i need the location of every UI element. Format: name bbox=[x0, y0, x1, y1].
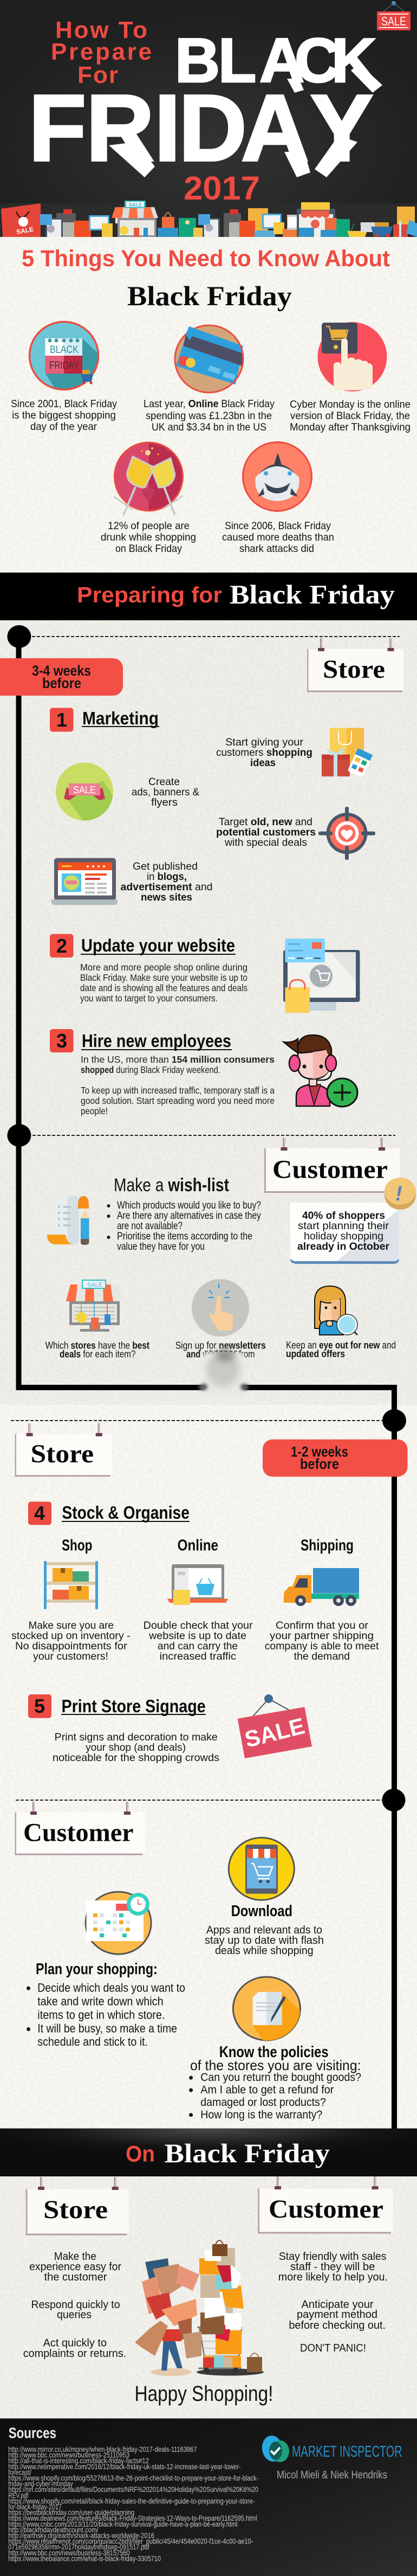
text: store tips: Make the bbox=[54, 2250, 96, 2263]
column: shop: Shop bbox=[62, 1537, 92, 1554]
panel: 1-2 weeks background bbox=[0, 1405, 417, 2129]
text: sign up for newsletters bbox=[175, 1340, 266, 1360]
list: source links: REV.pdf bbox=[8, 2491, 29, 2500]
title: How To Prepare For bbox=[51, 17, 152, 88]
step 3: hire new employees bbox=[50, 1029, 357, 1116]
icon: woman with magnifier bbox=[315, 1286, 357, 1335]
timeline: node 2 bbox=[7, 1124, 395, 1147]
list: source links: forecast/ bbox=[8, 2468, 31, 2476]
text: shop: stocked up on inventory - bbox=[11, 1630, 131, 1642]
text: since 2001: Since 2001, Black Friday bbox=[11, 398, 117, 410]
list: policy bullets: How long is the warranty? bbox=[200, 2109, 322, 2121]
text: authors: Micol Mieli & Niek Hendriks bbox=[277, 2469, 387, 2481]
badge: 5 bbox=[28, 1694, 51, 1718]
heading: know the policies: of the stores you are visiting: bbox=[190, 2057, 361, 2073]
text: eye out: Keep an eye out for new and bbox=[286, 1340, 396, 1351]
badge: 3: 3 bbox=[56, 1030, 67, 1052]
text: customer tips: payment method bbox=[297, 2308, 377, 2321]
icon: delivery truck bbox=[284, 1568, 359, 1606]
panel: fact cyber monday bbox=[290, 322, 411, 433]
text: customer tips: before checking out. bbox=[289, 2319, 386, 2331]
heading: marketing: Marketing bbox=[82, 708, 159, 728]
text: eye out bbox=[286, 1340, 396, 1359]
badge: 3 bbox=[50, 1029, 74, 1052]
text: which stores: Which stores have the best bbox=[45, 1340, 149, 1351]
text: cyber monday bbox=[290, 399, 411, 433]
icon: champagne glasses circle bbox=[114, 442, 183, 515]
text: create ads: ads, banners & bbox=[132, 786, 199, 798]
column: online: Online bbox=[178, 1537, 218, 1554]
icon: tablet and hand circle bbox=[317, 322, 387, 391]
text: download: Apps and relevant ads to bbox=[206, 1924, 322, 1936]
icon: calendar circle bbox=[28, 321, 100, 390]
text: store tips: queries bbox=[57, 2309, 92, 2321]
heading: print store signage: Print Store Signage bbox=[62, 1696, 206, 1716]
tab: 1-2 weeks before bbox=[263, 1440, 407, 1477]
list: policy bullets: Am I able to get a refund for bbox=[200, 2084, 334, 2096]
panel: 3-4 weeks background bbox=[0, 620, 417, 1405]
text: get published bbox=[120, 860, 212, 903]
list: plan bullets: It will be busy, so make a time bbox=[37, 2021, 177, 2035]
icon: tilted sale sign: SALE bbox=[242, 1713, 307, 1752]
icon: monitor with card and bag bbox=[283, 939, 360, 1013]
text: get published: advertisement and bbox=[120, 881, 212, 893]
icon: contract circle bbox=[233, 1977, 303, 2044]
list: wish-list questions: are not available? bbox=[117, 1220, 183, 1232]
callout: 40 percent of shoppers: already in October bbox=[297, 1241, 389, 1252]
sign: store 2 bbox=[15, 1423, 112, 1477]
icon: store with price tags: SALE bbox=[87, 1282, 102, 1288]
heading: preparing for black friday: Preparing for bbox=[77, 582, 222, 607]
text: cyber monday: Cyber Monday is the online bbox=[290, 399, 411, 410]
text: shipping: Confirm that you or bbox=[276, 1620, 369, 1631]
list: plan bullets: take and write down which bbox=[37, 1994, 164, 2008]
step 5: print store signage bbox=[28, 1694, 312, 1764]
text: shopping ideas bbox=[216, 736, 312, 769]
tab: 3-4 weeks before: 3-4 weeks bbox=[32, 663, 91, 679]
sign: store 3: Store bbox=[43, 2195, 108, 2224]
icon: hanging sale sign bbox=[377, 1, 411, 30]
text: shopping ideas: customers shopping bbox=[216, 747, 312, 759]
title: How To Prepare For: For bbox=[77, 62, 118, 88]
panel: eye out for offers bbox=[286, 1286, 396, 1359]
text: sign up for newsletters: and wishlists from bbox=[186, 1349, 255, 1360]
panel: compare stores bbox=[45, 1280, 149, 1360]
icon: store with price tags bbox=[66, 1280, 122, 1332]
text: update paragraph: you want to target to your consumers. bbox=[80, 993, 218, 1004]
illustration: shopper with boxes and cart bbox=[135, 2240, 264, 2376]
badge: 4 bbox=[28, 1502, 51, 1525]
sign: customer bbox=[264, 1138, 400, 1193]
list: source links: http://blackfridaydeathcount.com/ bbox=[8, 2525, 99, 2534]
icon: calendar circle: FRIDAY bbox=[49, 360, 79, 371]
text: which stores: deals for each item? bbox=[60, 1349, 135, 1360]
text: create ads: flyers bbox=[151, 796, 178, 808]
text: customer tips: Anticipate your bbox=[301, 2298, 374, 2311]
badge: 1: 1 bbox=[56, 709, 67, 731]
icon: tilted sale sign bbox=[238, 1694, 312, 1758]
panel: fact shark attacks bbox=[222, 442, 334, 555]
text: which stores bbox=[45, 1340, 149, 1360]
title: FRIDAY: FRIDAY bbox=[29, 75, 373, 181]
title: How To Prepare For: Prepare bbox=[51, 38, 152, 65]
step 4: stock and organise bbox=[11, 1502, 379, 1662]
step 2: update your website bbox=[50, 934, 360, 1013]
text: hire paragraph: people! bbox=[81, 1106, 108, 1116]
illustration: row of shopping items: SALE bbox=[129, 202, 142, 208]
text: shipping: the demand bbox=[294, 1650, 350, 1662]
text: shop bbox=[11, 1620, 131, 1662]
badge: 5: 5 bbox=[34, 1695, 45, 1717]
sign: store bbox=[307, 638, 403, 692]
panel: on black friday background bbox=[0, 2176, 417, 2419]
text: download: stay up to date with flash bbox=[205, 1934, 324, 1947]
text: online: increased traffic bbox=[160, 1650, 236, 1662]
icon: bag gift calculator bbox=[322, 728, 373, 778]
callout: 40 percent of shoppers: start planning their bbox=[298, 1220, 389, 1232]
panel: facts background bbox=[0, 237, 417, 573]
text: store tips: Respond quickly to bbox=[31, 2298, 120, 2311]
list: source links: https://bestblackfriday.com/user-guide/planning bbox=[8, 2508, 134, 2517]
text: customer tips bbox=[278, 2250, 388, 2354]
list: source links: 071e59296358/rmn-2017holidaytrendswp-091517.pdf bbox=[8, 2542, 149, 2551]
heading: update your website: Update your website bbox=[81, 935, 235, 955]
text: hire paragraph: good solution. Start spreading word you need more bbox=[81, 1095, 275, 1106]
text: since 2001 bbox=[11, 398, 117, 433]
heading: make a wish-list: Make a wish-list bbox=[114, 1175, 229, 1196]
icon: exclamation coin: ! bbox=[395, 1183, 402, 1205]
tab: 3-4 weeks before bbox=[0, 658, 123, 696]
list: source links: https://www.shopify.com/blog/55276613-the-26-point-checklist-to-prepare-your-store-for-black- bbox=[8, 2474, 259, 2482]
text: signage: Print signs and decoration to make bbox=[55, 1731, 218, 1743]
timeline: node 3 bbox=[11, 1409, 406, 1432]
icon: sale ribbon circle bbox=[56, 762, 114, 824]
text: signage: your shop (and deals) bbox=[86, 1742, 186, 1753]
text: online spending bbox=[144, 398, 275, 433]
text: hire paragraph: In the US, more than 154 million consumers bbox=[81, 1054, 275, 1065]
list: source links: http://www.netimperative.com/2016/12/black-friday-uk-stats-12-increase-last-year-lower- bbox=[8, 2462, 241, 2471]
panel: sources footer bbox=[0, 2418, 417, 2576]
heading: Black Friday: Black Friday bbox=[127, 281, 292, 312]
list: policy bullets bbox=[189, 2071, 361, 2121]
callout: 40 percent of shoppers: holiday shopping bbox=[304, 1230, 383, 1242]
text: shipping: company is able to meet bbox=[265, 1640, 379, 1652]
text: target customers: Target old, new and bbox=[219, 816, 312, 828]
text: update paragraph: More and more people shop online during bbox=[80, 962, 247, 973]
icon: target with heart bbox=[318, 807, 375, 860]
list: source links: http://www.bbc.com/news/business-25110953 bbox=[8, 2451, 129, 2459]
callout: 40 percent of shoppers bbox=[290, 1203, 399, 1264]
text: download bbox=[205, 1924, 324, 1957]
timeline: connector bbox=[16, 637, 397, 2129]
icon: pointing hand circle bbox=[192, 1279, 249, 1337]
text: shark attacks: Since 2006, Black Friday bbox=[225, 520, 331, 532]
text: since 2001: day of the year bbox=[30, 421, 97, 433]
text: store tips: the customer bbox=[44, 2271, 107, 2283]
text: eye out: updated offers bbox=[286, 1348, 345, 1359]
text: online spending: UK and $3.34 bn in the US bbox=[152, 421, 266, 433]
text: shipping: your partner shipping bbox=[270, 1630, 374, 1642]
text: sign up for newsletters: Sign up for newsletters bbox=[175, 1340, 266, 1351]
heading: hire new employees: Hire new employees bbox=[82, 1031, 231, 1051]
list: wish-list questions: Which products would you like to buy? bbox=[117, 1199, 261, 1211]
text: get published: Get published bbox=[133, 860, 198, 872]
step 1: marketing bbox=[50, 708, 375, 905]
list: source links: https://www.thebalance.com/what-is-black-friday-3305710 bbox=[8, 2554, 161, 2562]
list: wish-list questions: Are there any alternatives in case they bbox=[117, 1210, 261, 1222]
heading: download: Download bbox=[231, 1903, 292, 1920]
icon: list scroll and pencil bbox=[47, 1196, 89, 1245]
badge: 2 bbox=[50, 934, 74, 958]
text: shopping ideas: ideas bbox=[250, 757, 276, 769]
sign: customer 3: Customer bbox=[269, 2195, 383, 2224]
text: get published: in blogs, bbox=[147, 871, 187, 883]
text: hire paragraph: shopped during Black Friday weekend. bbox=[81, 1064, 220, 1075]
column: shipping: Shipping bbox=[301, 1537, 354, 1554]
text: signage: noticeable for the shopping crowds bbox=[53, 1752, 219, 1764]
list: source links: https://www.cnbc.com/2013/11/20/black-friday-survival-guide-have-a-plan-be-early.html bbox=[8, 2520, 238, 2528]
icon: sale ribbon circle: SALE bbox=[73, 785, 96, 795]
panel: preparing band bbox=[0, 573, 417, 620]
icon: phone store circle bbox=[229, 1838, 294, 1900]
panel: download apps bbox=[205, 1838, 324, 1957]
text: download: deals while shopping bbox=[215, 1944, 314, 1957]
sign: store: Store bbox=[323, 655, 385, 684]
text: shark attacks: caused more deaths than bbox=[222, 531, 334, 543]
column: online bbox=[144, 1537, 253, 1662]
list: source links: http://earthsky.org/earth/shark-attacks-worldwide-2016 bbox=[8, 2531, 154, 2540]
text: update paragraph bbox=[80, 962, 247, 1004]
text: online spending: spending was £1.23bn in the bbox=[146, 410, 272, 422]
text: shop: Make sure you are bbox=[28, 1620, 114, 1631]
icon: shelves with boxes bbox=[44, 1561, 98, 1609]
text: update paragraph: date and is showing all the features and deals bbox=[80, 982, 247, 993]
badge: 2: 2 bbox=[56, 935, 67, 957]
illustration: row of shopping items: SALE bbox=[16, 226, 34, 236]
text: drunk shopping bbox=[101, 520, 196, 555]
panel: fact drunk shopping bbox=[101, 442, 196, 555]
list: wish-list questions: value they have for you bbox=[117, 1241, 205, 1252]
icon: shark circle bbox=[243, 442, 312, 511]
badge: 4: 4 bbox=[34, 1502, 45, 1524]
text: customer tips: DON'T PANIC! bbox=[300, 2342, 366, 2354]
list: source links: https://nrf.com/sites/default/files/Documents/NRF%202014%20Holiday%20Survival%20Kit%20 bbox=[8, 2485, 258, 2494]
list: plan bullets: schedule and stick to it. bbox=[37, 2035, 148, 2048]
text: drunk shopping: on Black Friday bbox=[115, 543, 182, 555]
text: create ads: Create bbox=[148, 776, 180, 788]
list: plan bullets bbox=[27, 1981, 185, 2048]
panel: newsletters bbox=[175, 1279, 266, 1360]
text: drunk shopping: 12% of people are bbox=[108, 520, 190, 532]
sign: customer 2: Customer bbox=[23, 1819, 134, 1847]
panel: know the policies bbox=[189, 1977, 361, 2121]
sign: customer: Customer bbox=[272, 1155, 388, 1184]
list: policy bullets: damaged or lost products? bbox=[200, 2096, 326, 2109]
text: store tips: complaints or returns. bbox=[23, 2347, 126, 2360]
heading: know the policies bbox=[190, 2044, 361, 2073]
text: online spending: Last year, Online Black Friday bbox=[144, 398, 275, 410]
text: hire paragraph bbox=[81, 1054, 275, 1116]
heading: preparing for black friday bbox=[77, 579, 395, 609]
heading: sources: Sources bbox=[9, 2425, 56, 2442]
text: update paragraph: Black Friday. Make sure your website is up to bbox=[80, 972, 247, 983]
column: shop bbox=[11, 1537, 131, 1662]
text: since 2001: is the biggest shopping bbox=[12, 409, 116, 421]
sign: customer 2 bbox=[15, 1802, 145, 1855]
icon: credit card circle bbox=[174, 325, 244, 393]
tab: 3-4 weeks before: before bbox=[42, 675, 81, 691]
list: wish-list questions: Prioritise the items according to the bbox=[117, 1230, 252, 1242]
text: online: and can carry the bbox=[158, 1640, 238, 1652]
list: source links: for-black-friday-2017 bbox=[8, 2502, 62, 2511]
timeline: node 1 bbox=[7, 625, 400, 648]
tab: 1-2 weeks before: 1-2 weeks bbox=[291, 1443, 348, 1460]
text: customer tips: more likely to help you. bbox=[278, 2271, 388, 2283]
panel: fact online spending bbox=[144, 325, 275, 433]
list: source links: http://www.bbc.com/news/business-38157560 bbox=[8, 2548, 130, 2557]
text: online: website is up to date bbox=[148, 1630, 246, 1642]
text: shipping bbox=[265, 1620, 379, 1662]
panel: fact since 2001 bbox=[11, 321, 117, 433]
list: source links bbox=[8, 2445, 259, 2562]
text: customer tips: staff - they will be bbox=[290, 2260, 375, 2273]
icon: exclamation coin bbox=[385, 1178, 416, 1210]
heading: 5 things: 5 Things You Need to Know About bbox=[22, 246, 390, 272]
list: source links: https://www.shopify.com/retail/black-friday-sales-the-definitive-guide-to-preparing-your-store- bbox=[8, 2496, 255, 2505]
text: cyber monday: version of Black Friday, the bbox=[290, 410, 410, 422]
list: plan bullets: items to get in which store. bbox=[37, 2008, 165, 2021]
list: policy bullets: Can you return the bought goods? bbox=[200, 2071, 361, 2084]
panel: header background bbox=[0, 0, 417, 237]
sign: store 2: Store bbox=[30, 1440, 94, 1468]
timeline: node 4 bbox=[16, 1789, 405, 1811]
heading: on black friday: On bbox=[126, 2141, 155, 2167]
sign: customer 3 bbox=[258, 2176, 393, 2234]
icon: laptop with web page bbox=[51, 858, 118, 905]
text: shark attacks: shark attacks did bbox=[239, 543, 314, 555]
panel: plan your shopping bbox=[27, 1892, 185, 2048]
list: source links: http://all-that-is-interesting.com/black-friday-facts#12 bbox=[8, 2456, 149, 2465]
callout: 40 percent of shoppers: 40% of shoppers bbox=[302, 1210, 385, 1222]
panel: on black friday band bbox=[0, 2129, 417, 2176]
text: happy shopping: Happy Shopping! bbox=[134, 2382, 273, 2406]
text: create ads bbox=[132, 776, 199, 808]
heading: on black friday: Black Friday bbox=[165, 2138, 330, 2168]
text: store tips: Act quickly to bbox=[43, 2337, 107, 2349]
icon: laptop with basket bbox=[167, 1564, 228, 1605]
text: hire paragraph: To keep up with increased traffic, temporary staff is a bbox=[81, 1085, 275, 1096]
text: signage bbox=[53, 1731, 219, 1764]
list: wish-list questions bbox=[107, 1199, 261, 1252]
heading: preparing for black friday: Black Friday bbox=[230, 579, 395, 609]
text: online: Double check that your bbox=[144, 1620, 253, 1631]
title: BLACK: BLACK bbox=[175, 26, 376, 95]
text: cyber monday: Monday after Thanksgiving bbox=[290, 421, 411, 433]
text: online bbox=[144, 1620, 253, 1662]
list: source links: friday-and-cyber-monday bbox=[8, 2479, 73, 2488]
text: target customers bbox=[216, 816, 316, 849]
text: shop: No disappointments for bbox=[15, 1640, 127, 1652]
smudge: blurred area over timeline bbox=[200, 1350, 248, 1395]
text: target customers: with special deals bbox=[224, 837, 307, 849]
logo: market inspector bbox=[260, 2434, 402, 2463]
text: drunk shopping: drunk while shopping bbox=[101, 531, 196, 543]
text: get published: news sites bbox=[141, 891, 192, 903]
heading: know the policies: Know the policies bbox=[219, 2044, 329, 2061]
icon: calendar circle: BLACK bbox=[50, 344, 79, 356]
text: target customers: potential customers bbox=[216, 826, 316, 838]
tab: 1-2 weeks before: before bbox=[300, 1456, 339, 1472]
sign: store 3 bbox=[26, 2177, 129, 2235]
title: 2017: 2017 bbox=[184, 170, 260, 207]
text: store tips: experience easy for bbox=[29, 2260, 121, 2273]
list: plan bullets: Decide which deals you want to bbox=[37, 1981, 185, 1995]
column: shipping bbox=[265, 1537, 379, 1662]
icon: calendar and clock circle bbox=[86, 1892, 151, 1954]
icon: hanging sale sign: SALE bbox=[381, 14, 406, 28]
list: source links: https://www.retailmenot.com/corp/gui/acc2bd9/filer_public/45/4e/454e0020-f1ce-4c00-ae10- bbox=[8, 2537, 253, 2546]
badge: 1 bbox=[50, 708, 74, 732]
text: customer tips: Stay friendly with sales bbox=[279, 2250, 387, 2263]
heading: stock and organise: Stock & Organise bbox=[62, 1502, 190, 1523]
heading: plan your shopping: Plan your shopping: bbox=[36, 1961, 158, 1978]
title: How To Prepare For: How To bbox=[55, 17, 147, 43]
list: source links: https://www.dealnews.com/features/Black-Friday-Strategies-12-Ways-to-Prepare/1162595.html bbox=[8, 2514, 257, 2522]
list: source links: http://www.mirror.co.uk/money/when-black-friday-2017-deals-11163867 bbox=[8, 2445, 197, 2453]
text: shark attacks bbox=[222, 520, 334, 555]
illustration: row of shopping items bbox=[0, 201, 417, 237]
icon: employee with headset and plus bbox=[284, 1035, 357, 1107]
text: shopping ideas: Start giving your bbox=[225, 736, 304, 748]
text: store tips bbox=[23, 2250, 126, 2360]
text: shop: your customers! bbox=[33, 1650, 108, 1662]
